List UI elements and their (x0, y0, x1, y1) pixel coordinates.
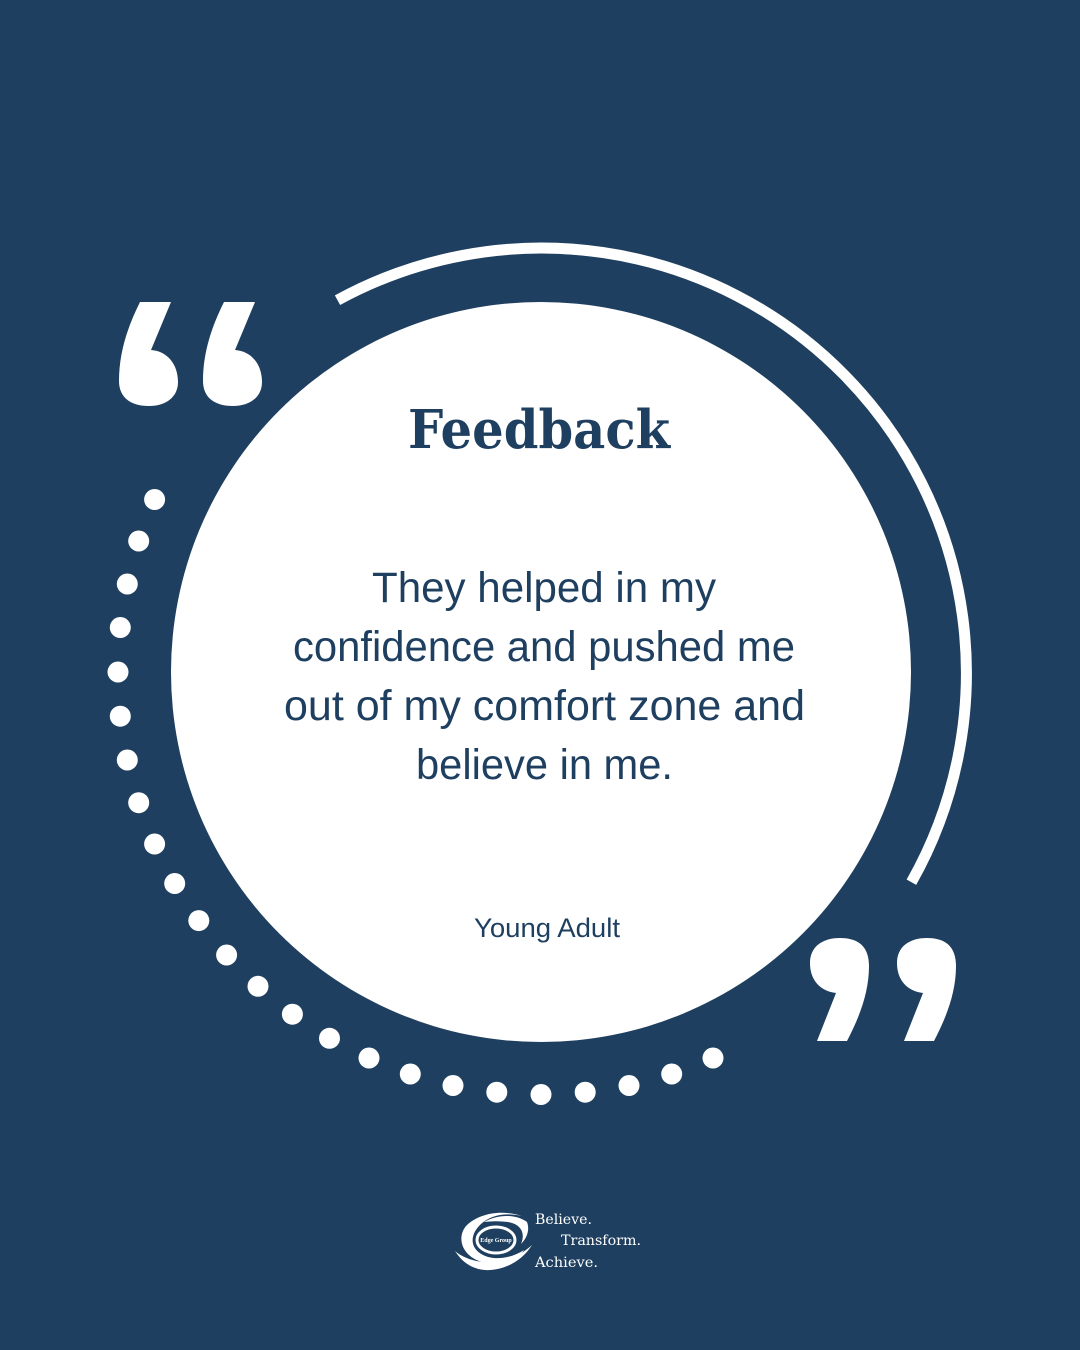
attribution: Young Adult (474, 913, 620, 943)
icon: swirl logo (455, 1213, 532, 1270)
quote text (284, 564, 805, 789)
tagline (534, 1212, 641, 1271)
dotted arc (108, 489, 724, 1105)
tagline: Believe. (535, 1212, 592, 1228)
logo (455, 1212, 641, 1271)
quote text: confidence and pushed me (293, 623, 795, 671)
icon: swirl logo: Edge Group (480, 1238, 512, 1244)
quote text: They helped in my (372, 564, 716, 612)
heading: Feedback (408, 399, 671, 461)
opening quotation mark icon (119, 302, 262, 406)
quote text: believe in me. (416, 741, 673, 789)
white circle panel (171, 302, 911, 1042)
closing quotation mark icon (810, 938, 956, 1041)
arc around circle (338, 248, 966, 882)
tagline: Transform. (561, 1233, 641, 1249)
quote text: out of my comfort zone and (284, 682, 805, 730)
tagline: Achieve. (534, 1255, 598, 1271)
